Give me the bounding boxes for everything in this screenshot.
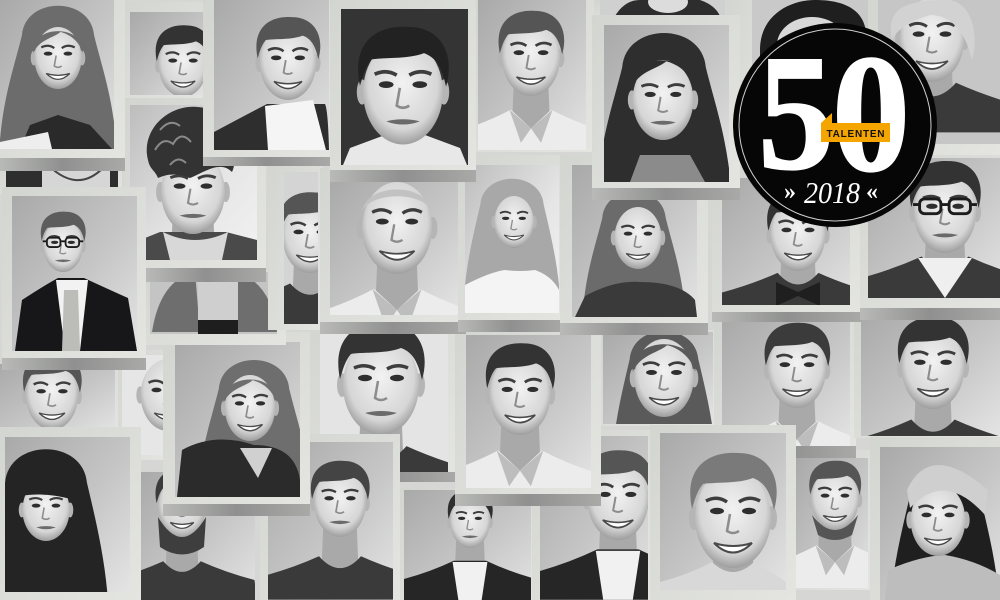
row 1: large portrait on dark background <box>330 0 476 182</box>
row 2: woman, hair only <box>146 270 286 345</box>
year 2018: 2018 <box>804 175 860 210</box>
orange tag <box>821 123 890 142</box>
row 3: man with blond hair, far left <box>0 354 122 432</box>
row 3: man in dark jacket, far right <box>847 310 1000 464</box>
row 1: woman with dark hair <box>592 15 740 252</box>
row 1: blond man, top right <box>836 0 1000 155</box>
row 1: man in suit <box>203 0 331 166</box>
row 4: man in dark jacket <box>400 488 540 600</box>
row 2: bald man <box>299 168 495 343</box>
row 1: side frame strip <box>726 0 872 166</box>
TALENTEN label: TALENTEN <box>826 129 884 140</box>
row 3: man, close-up <box>279 320 483 499</box>
row 1: woman with long wavy hair <box>0 0 125 194</box>
row 3: man in white shirt <box>711 318 883 468</box>
row 4: bearded man <box>757 450 913 590</box>
numeral 5: 5 <box>758 21 834 204</box>
row 3: partly hidden man <box>118 350 200 460</box>
row 2: man with bow tie <box>712 168 880 322</box>
row 2: young man in sweater <box>231 165 389 330</box>
row 4: woman with dark fringe <box>0 427 141 600</box>
row 4: woman with headband <box>870 437 1000 600</box>
row 1: man with curly hair behind badge <box>760 0 866 73</box>
row 4: laughing man <box>529 430 707 600</box>
row 1: woman, top edge, partly hidden <box>590 0 725 18</box>
right chevrons: « <box>866 179 878 205</box>
row 2: man with curly hair <box>124 96 266 282</box>
badge: 50 Talenten 2018 <box>733 21 937 227</box>
row 2: partly hidden chin card <box>0 160 122 194</box>
row 3: smiling man in white shirt <box>426 324 614 506</box>
row 3: woman with wavy hair <box>163 332 312 544</box>
row 1: man smiling, checked shirt <box>445 0 617 157</box>
row 4: man in dark t-shirt <box>256 434 424 600</box>
row 2: man in black suit with glasses <box>2 187 146 370</box>
orange tag tip <box>821 113 832 123</box>
row 1: man with short hair, second from left <box>120 2 212 98</box>
row 4: bearded man in patterned shirt <box>107 468 257 600</box>
row 2: blonde woman in white <box>458 155 564 332</box>
numeral 0: 0 <box>832 21 910 207</box>
row 2: woman with long hair <box>560 155 708 357</box>
row 4: smiling man, front <box>650 425 796 600</box>
row 3: smiling woman, centre right <box>598 330 716 452</box>
left chevrons: » <box>784 179 796 205</box>
row 2: man with glasses, right <box>851 155 1000 320</box>
